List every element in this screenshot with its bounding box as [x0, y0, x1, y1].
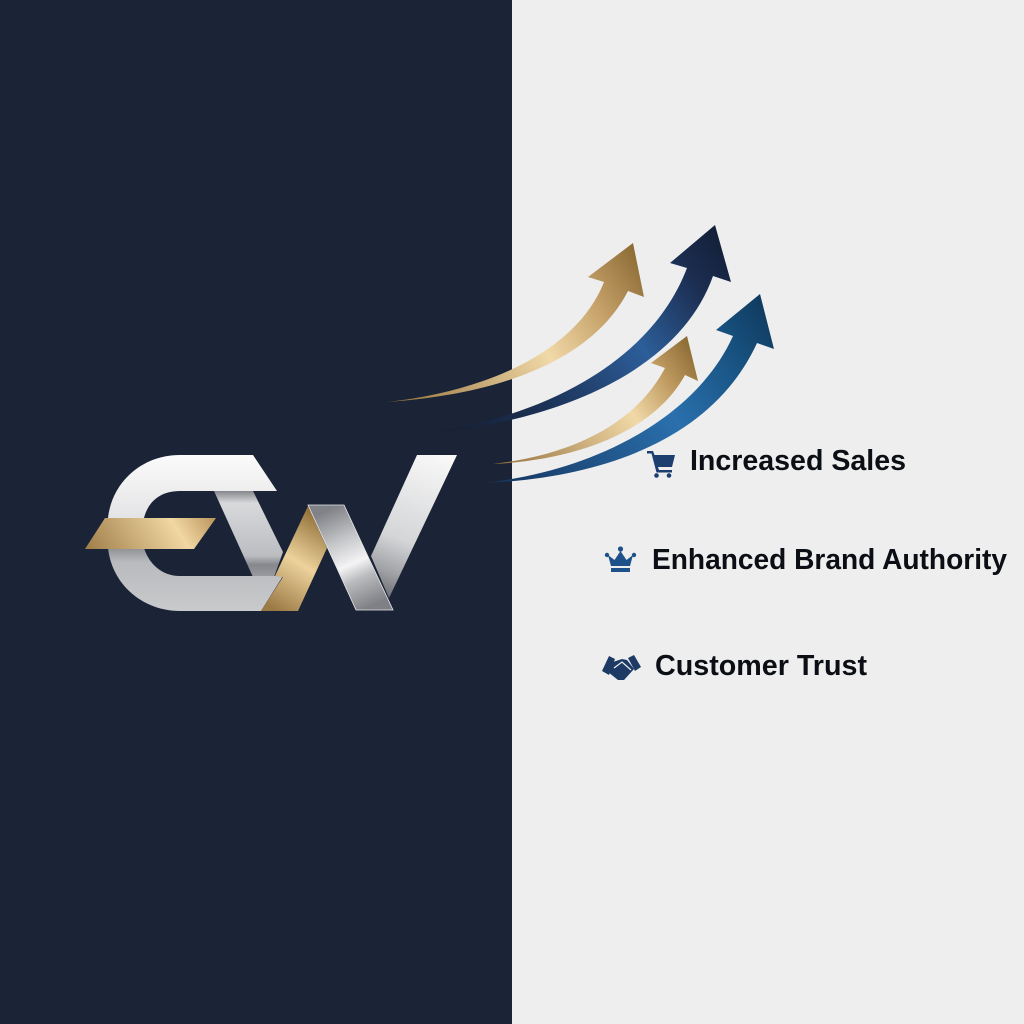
panel: light background: [512, 0, 1024, 1024]
logo: W middle silver stroke: [308, 505, 393, 610]
arrow: blue lower: [483, 294, 774, 483]
label: Customer Trust: Customer Trust: [655, 650, 868, 682]
handshake: left cuff: [602, 656, 615, 675]
handshake: right cuff: [628, 655, 641, 671]
handshake: finger line: [614, 662, 631, 670]
icon: EW logo: [85, 455, 457, 611]
label: Enhanced Brand Authority: Enhanced Brand Authority: [652, 544, 1007, 576]
logo: E lower arm: [108, 548, 283, 611]
label: Increased Sales: Increased Sales: [690, 445, 906, 477]
icon: crown: [605, 546, 636, 572]
handshake: clasped hands: [608, 659, 634, 680]
logo: V stroke of W behind: [214, 491, 283, 577]
icon: shopping cart: [647, 451, 675, 478]
logo: E upper arm: [108, 455, 277, 518]
arrow: navy upper: [437, 225, 731, 432]
logo: gold E bar: [85, 518, 216, 549]
icon: handshake: [602, 655, 641, 680]
arrow: gold lower: [493, 336, 698, 464]
logo: gold W stroke: [261, 506, 327, 611]
panel: navy background: [0, 0, 512, 1024]
arrow: gold upper: [387, 243, 644, 402]
logo: right stroke of W: [371, 455, 457, 598]
